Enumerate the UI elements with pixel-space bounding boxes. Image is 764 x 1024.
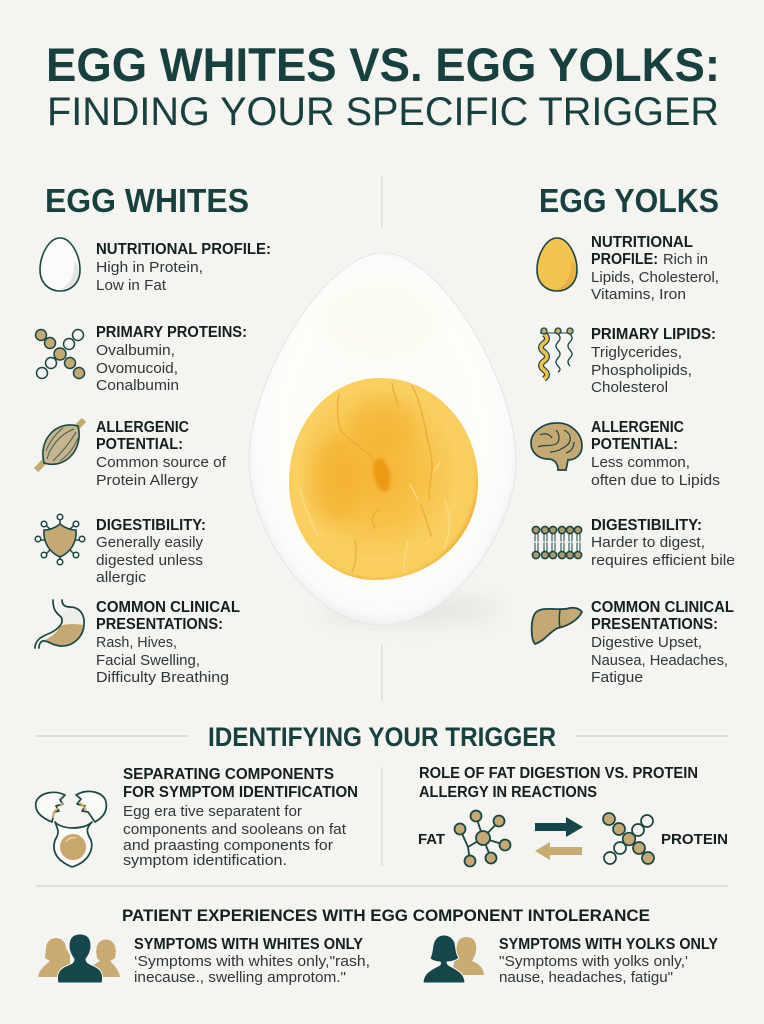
text: allergenic potential: POTENTIAL: xyxy=(96,436,183,453)
icon: group of patients whites xyxy=(38,934,120,983)
text: nutritional profile: NUTRITIONAL PROFILE: xyxy=(96,241,271,258)
text: clinical presentations whites: Facial Swelling, xyxy=(96,652,200,669)
text: primary lipids xyxy=(591,326,716,396)
text: nutritional profile: PROFILE: xyxy=(591,251,658,268)
title: FINDING YOUR SPECIFIC TRIGGER xyxy=(47,90,719,134)
text: clinical presentations yolks: Fatigue xyxy=(591,669,643,686)
text: clinical presentations yolks: Digestive Upset, xyxy=(591,634,702,651)
icon: lipid chains xyxy=(540,328,573,379)
text: allergenic potential: ALLERGENIC xyxy=(96,419,189,436)
diagram: fat network xyxy=(454,810,510,866)
text: nutritional profile: Vitamins, Iron xyxy=(591,286,686,303)
text: separating components: FOR SYMPTOM IDENTIFICATION xyxy=(123,784,358,801)
title: EGG WHITES VS. EGG YOLKS: xyxy=(46,38,720,91)
center divider top xyxy=(381,176,383,228)
text: symptoms with whites only xyxy=(134,936,370,986)
diagram: protein chain xyxy=(603,813,654,864)
text: primary lipids: Triglycerides, xyxy=(591,344,682,361)
text: digestibility xyxy=(96,517,206,586)
divider between trigger columns xyxy=(381,767,383,866)
text: digestibility xyxy=(591,517,735,569)
text: allergenic potential: Common source of xyxy=(96,454,227,471)
text: separating components xyxy=(123,766,358,869)
icon: muscle xyxy=(36,420,84,470)
text: digestibility: digested unless xyxy=(96,552,203,569)
text: symptoms with whites only: SYMPTOMS WITH WHITES ONLY xyxy=(134,936,364,953)
panel: egg whites facts xyxy=(35,238,271,686)
text: allergenic potential: often due to Lipids xyxy=(591,472,720,489)
text: clinical presentations whites: PRESENTATIONS: xyxy=(96,616,223,633)
text: nutritional profile: Rich in xyxy=(663,251,708,268)
text: digestibility: DIGESTIBILITY: xyxy=(591,517,702,534)
text: allergenic potential: POTENTIAL: xyxy=(591,436,678,453)
text: nutritional profile: High in Protein, xyxy=(96,259,203,276)
text: role of fat digestion: ROLE OF FAT DIGESTION VS. PROTEIN xyxy=(419,765,698,782)
icon: protein chain xyxy=(36,330,84,378)
text: allergenic potential: Protein Allergy xyxy=(96,472,199,489)
text: separating components: Egg era tive separatent for xyxy=(123,803,302,820)
text: clinical presentations whites: COMMON CLINICAL xyxy=(96,599,240,616)
text: digestibility: Generally easily xyxy=(96,534,203,551)
text: primary lipids: Phospholipids, xyxy=(591,362,692,379)
arrow: protein to fat xyxy=(535,842,582,860)
text: nutritional profile xyxy=(591,234,719,303)
icon: yolk egg xyxy=(537,238,577,291)
text: allergenic potential: Less common, xyxy=(591,454,690,471)
text: nutritional profile: Low in Fat xyxy=(96,277,167,294)
text: clinical presentations whites: Difficulty Breathing xyxy=(96,669,229,686)
text: separating components: SEPARATING COMPONENTS xyxy=(123,766,334,783)
text: clinical presentations yolks: Nausea, Headaches, xyxy=(591,652,728,669)
icon: separated egg shells xyxy=(36,791,106,867)
section heading: identifying your trigger: IDENTIFYING YOUR TRIGGER xyxy=(208,722,556,752)
text: allergenic potential xyxy=(591,419,720,489)
text: clinical presentations yolks: PRESENTATIONS: xyxy=(591,616,718,633)
heading: patient experiences: PATIENT EXPERIENCES WITH EGG COMPONENT INTOLERANCE xyxy=(122,906,650,925)
text: primary lipids: PRIMARY LIPIDS: xyxy=(591,326,716,343)
text: separating components: components and sooleans on fat xyxy=(123,821,347,838)
photo: boiled egg half xyxy=(249,253,516,625)
text: role of fat digestion: ALLERGY IN REACTIONS xyxy=(419,784,597,801)
text: separating components: symptom identification. xyxy=(123,852,287,869)
text: digestibility: requires efficient bile xyxy=(591,552,735,569)
text: symptoms with whites only: ‘Symptoms with whites only,"rash, xyxy=(134,953,370,970)
icon: stomach xyxy=(35,600,84,648)
text: primary proteins: Ovomucoid, xyxy=(96,360,178,377)
text: primary proteins xyxy=(96,324,247,394)
text: symptoms with yolks only xyxy=(499,936,719,986)
center divider bottom xyxy=(381,645,383,701)
text: symptoms with whites only: inecause., swelling amprotom." xyxy=(134,969,346,986)
text: digestibility: Harder to digest, xyxy=(591,534,705,551)
icon: shield with nodes xyxy=(35,514,85,565)
icon: cell membrane xyxy=(532,526,582,559)
text: primary proteins: PRIMARY PROTEINS: xyxy=(96,324,247,341)
text: primary proteins: Ovalbumin, xyxy=(96,342,175,359)
heading: egg yolks: EGG YOLKS xyxy=(539,182,719,219)
text: primary proteins: Conalbumin xyxy=(96,377,179,394)
text: symptoms with yolks only: SYMPTOMS WITH YOLKS ONLY xyxy=(499,936,719,953)
text: symptoms with yolks only: "Symptoms with yolks only,' xyxy=(499,953,688,970)
text: primary lipids: Cholesterol xyxy=(591,379,668,396)
text: digestibility: DIGESTIBILITY: xyxy=(96,517,206,534)
icon: white egg xyxy=(40,238,80,291)
text: allergenic potential xyxy=(96,419,227,489)
divider above patient section xyxy=(36,885,728,887)
text: nutritional profile: NUTRITIONAL xyxy=(591,234,693,251)
icon: group of patients yolks xyxy=(423,935,484,983)
label: protein: PROTEIN xyxy=(661,831,728,848)
panel: egg yolks facts xyxy=(531,234,735,686)
heading: egg whites: EGG WHITES xyxy=(45,182,249,219)
text: digestibility: allergic xyxy=(96,569,147,586)
text: clinical presentations whites xyxy=(96,599,240,686)
text: nutritional profile xyxy=(96,241,271,294)
text: nutritional profile: Lipids, Cholesterol, xyxy=(591,269,719,286)
text: clinical presentations whites: Rash, Hives, xyxy=(96,634,177,651)
icon: brain xyxy=(531,423,582,470)
text: symptoms with yolks only: nause, headaches, fatigu" xyxy=(499,969,673,986)
text: allergenic potential: ALLERGENIC xyxy=(591,419,684,436)
title xyxy=(46,38,720,134)
text: clinical presentations yolks: COMMON CLINICAL xyxy=(591,599,734,616)
arrow: fat to protein xyxy=(535,817,583,837)
label: fat: FAT xyxy=(418,831,445,848)
text: separating components: and praasting components for xyxy=(123,837,333,854)
icon: liver xyxy=(532,608,582,644)
text: clinical presentations yolks xyxy=(591,599,734,686)
text: role of fat digestion xyxy=(419,765,698,801)
